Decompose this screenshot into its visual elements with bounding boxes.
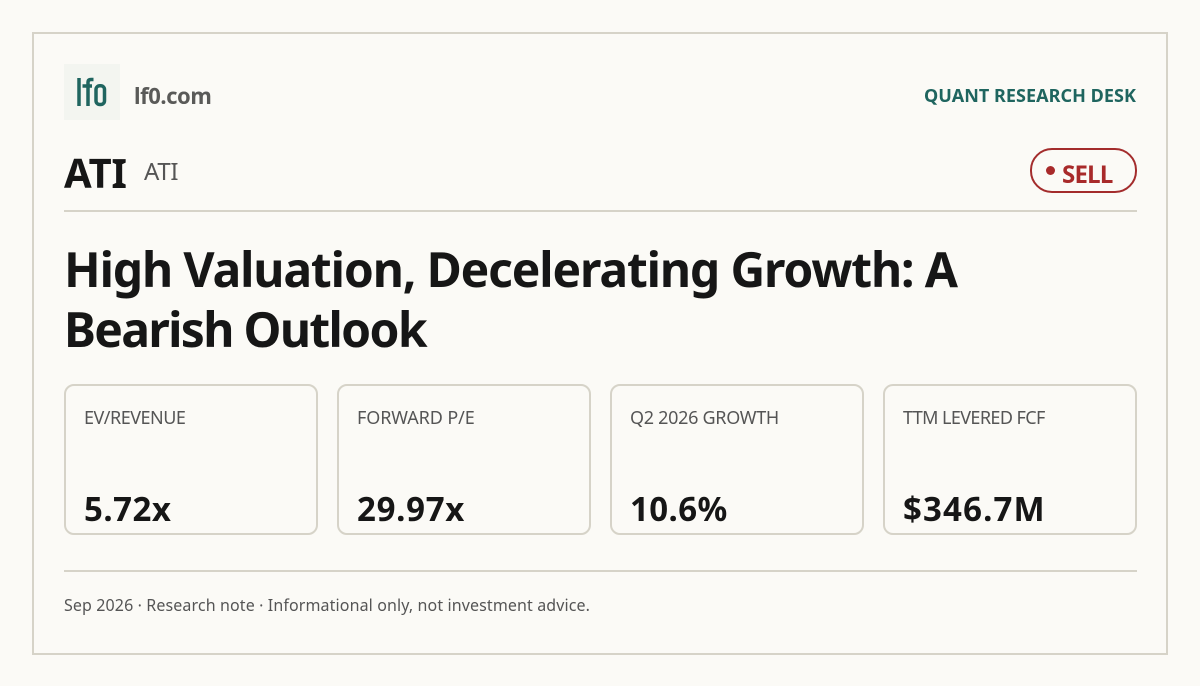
card: EV/Revenue: 5.72x	[84, 486, 171, 531]
card: Q2 2026 growth	[610, 384, 864, 535]
card: TTM levered FCF: $346.7M	[903, 486, 1046, 531]
footer note: Sep 2026 · Research note · Informational only, not investment advice.	[64, 594, 590, 616]
card: Forward P/E: FORWARD P/E	[357, 406, 475, 430]
metric cards	[64, 384, 1137, 535]
rating badge: sell	[1030, 148, 1137, 193]
desk label: QUANT RESEARCH DESK	[924, 84, 1136, 108]
rating text: SELL	[1062, 158, 1112, 191]
icon: rating dot	[1046, 166, 1055, 175]
card: EV/Revenue	[64, 384, 318, 535]
brand name: lf0.com	[134, 81, 211, 111]
card: TTM levered FCF: TTM LEVERED FCF	[903, 406, 1045, 430]
icon: lf0 logo	[64, 64, 120, 120]
card: EV/Revenue: EV/REVENUE	[84, 406, 185, 430]
company name: ATI	[144, 155, 178, 188]
card: Q2 2026 growth: Q2 2026 GROWTH	[630, 406, 779, 430]
headline	[64, 237, 958, 362]
headline: Bearish Outlook	[64, 297, 426, 362]
card: Forward P/E: 29.97x	[357, 486, 465, 531]
ticker: ATI	[64, 145, 127, 200]
headline: High Valuation, Decelerating Growth: A	[64, 237, 957, 302]
card: TTM levered FCF	[883, 384, 1137, 535]
card: Forward P/E	[337, 384, 591, 535]
card: Q2 2026 growth: 10.6%	[630, 486, 728, 531]
